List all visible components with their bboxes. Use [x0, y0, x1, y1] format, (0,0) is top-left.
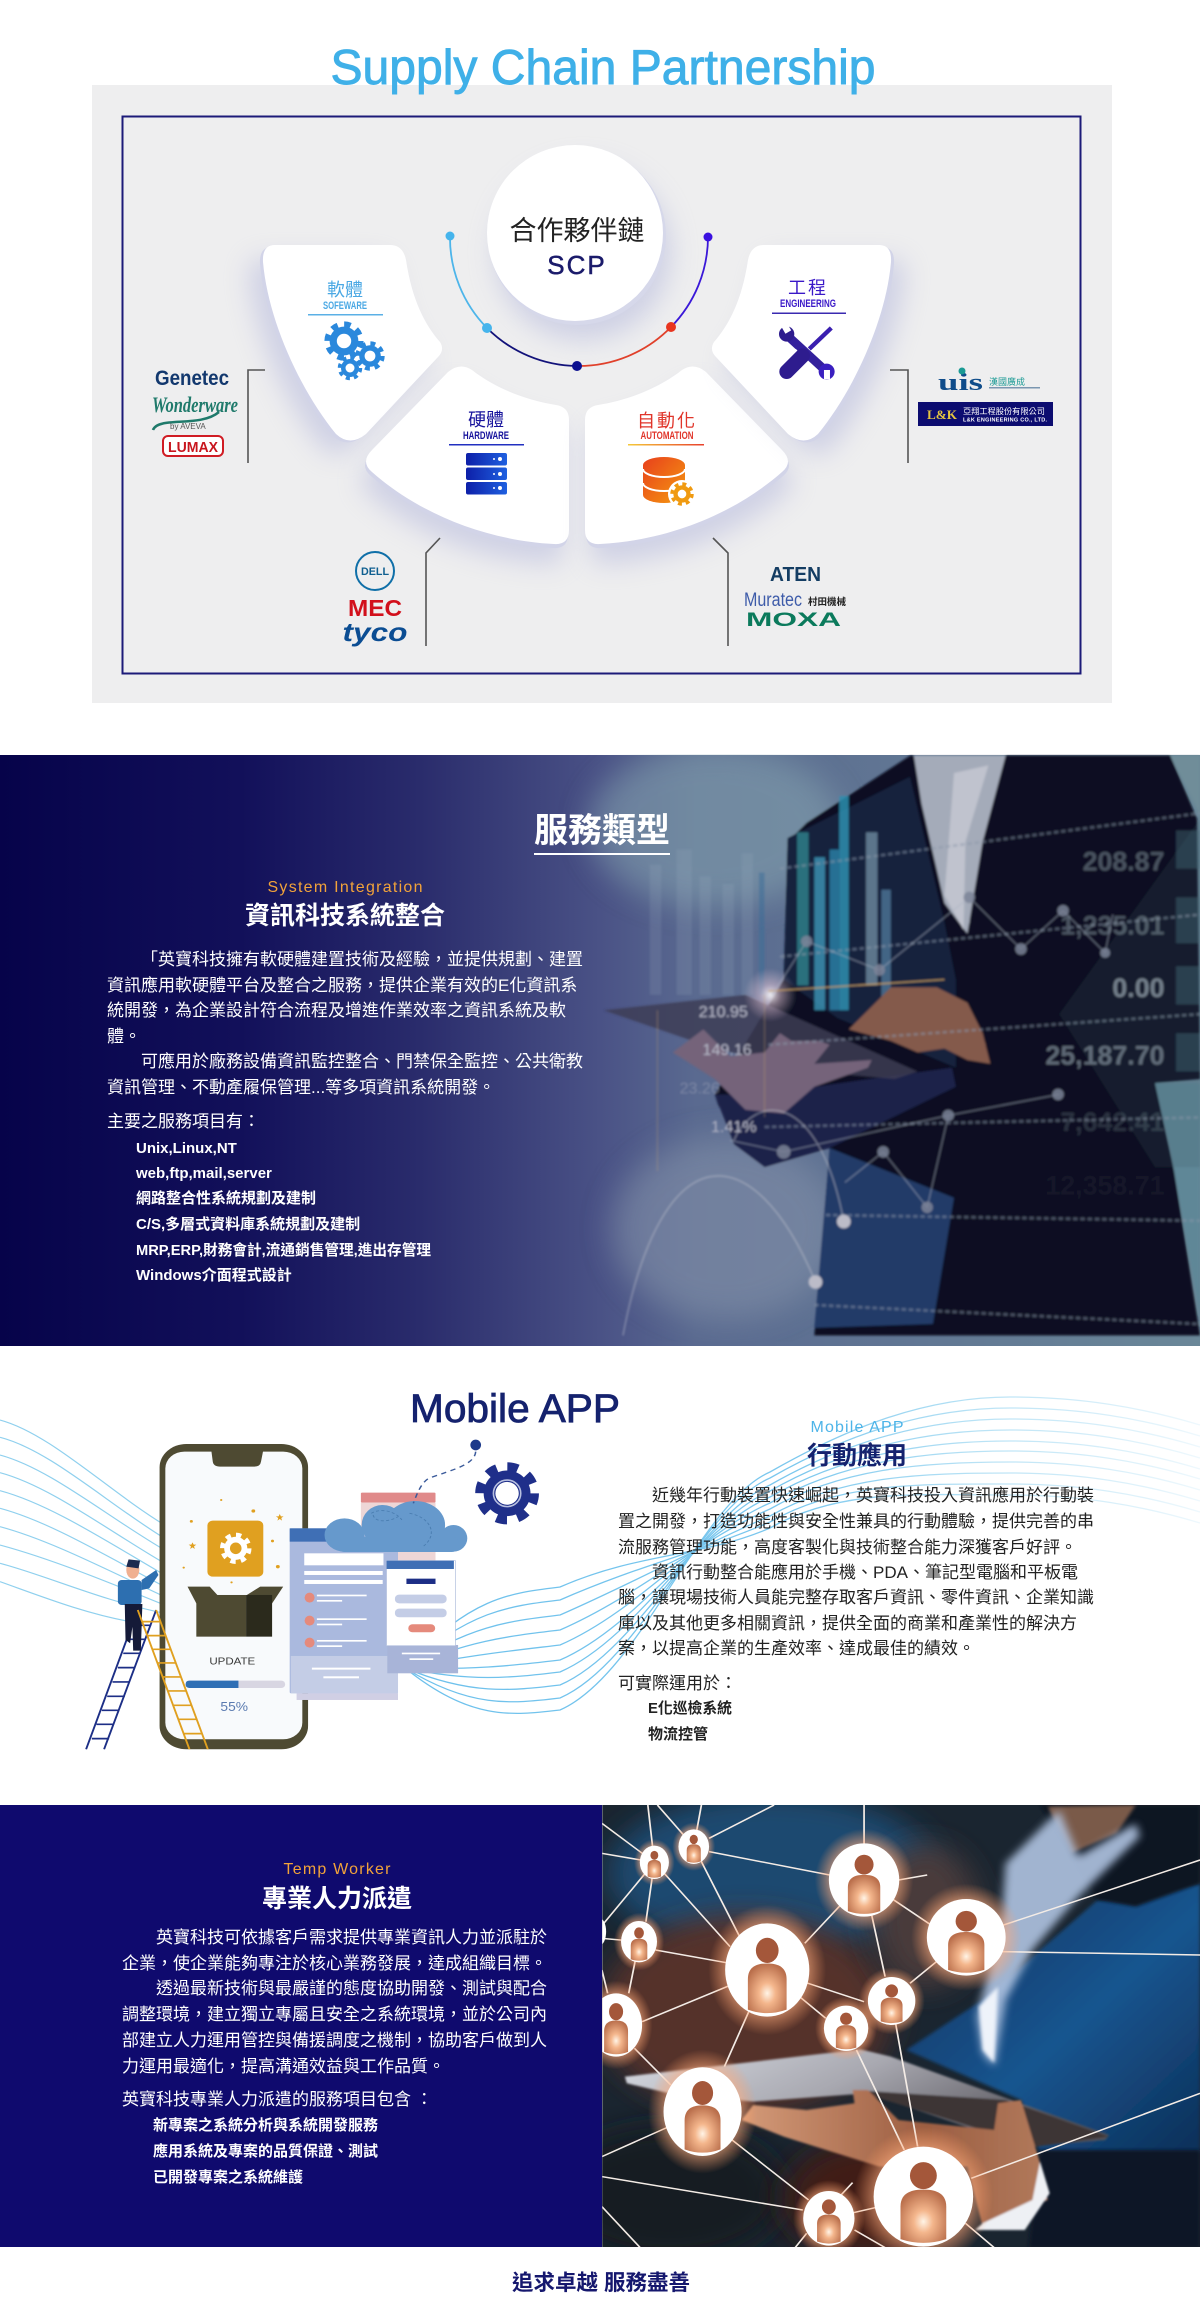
- icon: server: [466, 453, 507, 494]
- text block: temp worker services: 新專案之系統分析與系統開發服務: [153, 2116, 378, 2134]
- text block: main services list: MRP,ERP,財務會計,流通銷售管理,進出存管理: [136, 1241, 431, 1259]
- text block: mobile app description: 近幾年行動裝置快速崛起，英寶科技投入資訊應用於行動裝: [652, 1485, 1094, 1505]
- logos: automation partners: 村田機械: [808, 596, 847, 608]
- text block: main services list: Windows介面程式設計: [136, 1266, 292, 1284]
- icon: gears: [327, 324, 383, 378]
- photo: market figures: 208.87: [1083, 847, 1164, 877]
- panel: software blade: SOFEWARE: [323, 300, 367, 312]
- photo: network lines: [602, 1805, 1200, 2248]
- decorative waves: left: [0, 1420, 165, 1622]
- heading: temp worker: [262, 1861, 412, 1913]
- panel: engineering blade: ENGINEERING: [780, 298, 836, 310]
- icon: phone: UPDATE: [209, 1656, 255, 1667]
- heading: temp worker: 專業人力派遣: [262, 1885, 412, 1913]
- text block: temp worker services: [153, 2116, 378, 2186]
- photo: tablet and hand: [625, 2049, 1109, 2230]
- photo: market figures: 0.00: [1112, 973, 1164, 1003]
- photo: market figures: 7,642.41: [1060, 1107, 1165, 1137]
- photo: dotted trend lines: [765, 813, 1200, 1324]
- panel: mobile app: [0, 1387, 1200, 1749]
- text block: temp worker description: 力運用最適化，提高溝通效益與工作品質。: [122, 2057, 445, 2076]
- text block: mobile app description: [618, 1485, 1094, 1693]
- heading: system integration: System Integration: [268, 879, 422, 896]
- text block: main services list: web,ftp,mail,server: [135, 1165, 272, 1182]
- text block: mobile app description: 腦，讓現場技術人員能完整存取客戶資訊、零件資訊、企業知識: [618, 1587, 1094, 1607]
- panel: software blade: 軟體: [327, 280, 363, 300]
- icon: app windows: [290, 1493, 458, 1700]
- text block: system integration description: 主要之服務項目有：: [107, 1112, 260, 1131]
- chart: hub circle: 合作夥伴鏈: [510, 216, 644, 246]
- text block: temp worker description: 部建立人力運用管控與備援調度之機制，協助客戶做到人: [122, 2031, 547, 2050]
- photo: businessman with tablet: 149.16: [703, 1041, 752, 1059]
- logos: hardware partners: tyco: [342, 617, 408, 647]
- logos: hardware partners: [342, 552, 408, 647]
- logos: engineering partners: [918, 368, 1053, 426]
- text block: mobile app description: 置之開發，打造功能性與安全性兼具的行動體驗，提供完善的串: [618, 1512, 1094, 1531]
- text block: temp worker description: 英寶科技專業人力派遣的服務項目包含 ：: [122, 2089, 433, 2109]
- heading: mobile application: 行動應用: [807, 1441, 907, 1470]
- panel: temp worker: [0, 1793, 1200, 2267]
- text block: mobile app uses: [648, 1699, 732, 1743]
- photo: people nodes: [580, 1822, 1021, 2267]
- icon: database gear: [643, 457, 696, 508]
- text block: temp worker services: 已開發專案之系統維護: [153, 2168, 303, 2186]
- heading: mobile application: Mobile APP: [810, 1419, 904, 1436]
- text block: system integration description: 「英寶科技擁有軟硬體建置技術及經驗，並提供規劃、建置: [141, 949, 583, 969]
- text block: main services list: C/S,多層式資料庫系統規劃及建制: [136, 1215, 360, 1233]
- panel: automation blade: AUTOMATION: [640, 430, 694, 442]
- chart: hub circle: [487, 145, 671, 340]
- photo: businessman with tablet: [589, 746, 1200, 1336]
- heading: system integration: [245, 879, 445, 930]
- text block: main services list: 網路整合性系統規劃及建制: [136, 1189, 316, 1207]
- photo: market figures: 12,358.71: [1045, 1171, 1165, 1201]
- panel: engineering blade: 工程: [788, 278, 828, 298]
- text block: mobile app description: 資訊行動整合能應用於手機、PDA、筆記型電腦和平板電: [652, 1562, 1078, 1582]
- photo: businessman with tablet: 1.41%: [711, 1118, 757, 1136]
- text block: mobile app description: 案，以提高企業的生產效率、達成最佳的績效。: [618, 1639, 975, 1658]
- logos: software partners: Genetec: [155, 367, 229, 390]
- text block: temp worker description: 英寶科技可依據客戶需求提供專業資訊人力並派駐於: [156, 1927, 547, 1947]
- photo: graph nodes: [623, 897, 1113, 1336]
- text block: system integration description: [107, 949, 583, 1131]
- text block: mobile app uses: E化巡檢系統: [648, 1699, 732, 1717]
- text block: mobile app uses: 物流控管: [648, 1725, 708, 1743]
- panel: hardware blade: HARDWARE: [463, 430, 509, 442]
- text block: system integration description: 可應用於廠務設備資訊監控整合、門禁保全監控、公共衛教: [141, 1051, 583, 1071]
- photo: businessman with tablet: 23.26: [680, 1080, 720, 1098]
- text block: temp worker services: 應用系統及專案的品質保證、測試: [153, 2142, 378, 2160]
- logos: engineering partners: uis: [938, 370, 983, 396]
- text block: main services list: [135, 1140, 431, 1284]
- panel: automation blade: 自動化: [637, 411, 697, 431]
- text block: system integration description: 資訊管理、不動產履保管理...等多項資訊系統開發。: [107, 1078, 495, 1097]
- logos: engineering partners: L&K: [927, 407, 958, 422]
- icon: dashed link and gear: [413, 1440, 534, 1520]
- icon: phone: 55%: [220, 1700, 248, 1714]
- panel: engineering blade: [712, 245, 905, 454]
- icon: phone: [160, 1444, 308, 1749]
- chart: hub circle: SCP: [547, 250, 607, 280]
- panel: hardware blade: [361, 366, 569, 564]
- text block: temp worker description: 調整環境，建立獨立專屬且安全之系統環境，並於公司內: [122, 2005, 547, 2024]
- text block: main services list: Unix,Linux,NT: [136, 1140, 237, 1157]
- panel: software blade: [249, 245, 442, 454]
- photo: network of people over tablet: [602, 1805, 1200, 2247]
- text block: system integration description: 體。: [107, 1027, 141, 1046]
- logos: software partners: [152, 367, 238, 456]
- title: Supply Chain Partnership: [330, 41, 876, 95]
- text block: mobile app description: 庫以及其他更多相關資訊，提供全面的商業和產業性的解決方: [618, 1614, 1077, 1633]
- logos: automation partners: MOXA: [746, 610, 841, 631]
- logos: automation partners: Muratec: [744, 590, 802, 611]
- logos: software partners: Wonderware: [152, 392, 238, 417]
- text block: temp worker description: [122, 1927, 547, 2109]
- photo: market figures: 25,187.70: [1045, 1041, 1164, 1071]
- footer slogan: 追求卓越 服務盡善: [512, 2270, 690, 2295]
- chart: connecting arc: [446, 232, 712, 371]
- photo: market figures: [1045, 847, 1165, 1201]
- logos: software partners: by AVEVA: [170, 422, 206, 431]
- text block: system integration description: 統開發，為企業設計符合流程及增進作業效率之資訊系統及軟: [107, 1001, 566, 1020]
- logos: engineering partners: 漢國廣成: [989, 376, 1025, 387]
- heading: system integration: 資訊科技系統整合: [245, 902, 445, 930]
- logos: engineering partners: L&K ENGINEERING CO., LTD.: [963, 418, 1047, 424]
- photo: businessman with tablet: 210.95: [699, 1003, 748, 1021]
- logos: automation partners: ATEN: [770, 564, 821, 586]
- heading: mobile app: Mobile APP: [410, 1387, 620, 1431]
- text block: mobile app description: 流服務管理功能，高度客製化與技術整合能力深獲客戶好評。: [618, 1538, 1077, 1557]
- text block: mobile app description: 可實際運用於：: [618, 1674, 737, 1693]
- panel: automation blade: [585, 366, 793, 564]
- logos: hardware partners: MEC: [348, 595, 402, 621]
- logos: automation partners: [744, 564, 847, 631]
- illustration: phone, ladder and cloud: [0, 1420, 534, 1749]
- decorative waves: right: [405, 1397, 1200, 1713]
- text block: system integration description: 資訊應用軟硬體平台及整合之服務，提供企業有效的E化資訊系: [107, 975, 577, 995]
- heading: temp worker: Temp Worker: [284, 1861, 391, 1878]
- logos: software partners: LUMAX: [168, 439, 218, 456]
- photo: market figures: 1,235.01: [1060, 910, 1165, 940]
- logos: hardware partners: DELL: [361, 566, 389, 578]
- text block: temp worker description: 企業，使企業能夠專注於核心業務發展，達成組織目標。: [122, 1953, 547, 1973]
- logos: engineering partners: 亞翔工程股份有限公司: [963, 406, 1045, 416]
- text block: temp worker description: 透過最新技術與最嚴謹的態度協助開發、測試與配合: [156, 1979, 547, 1998]
- icon: ladders and worker: [86, 1559, 208, 1749]
- panel: hardware blade: 硬體: [468, 410, 504, 430]
- photo: bar chart overlay: [650, 796, 891, 1010]
- panel: system integration: [0, 746, 1200, 1346]
- bracket lines: [248, 370, 908, 646]
- heading: mobile application: [807, 1419, 907, 1470]
- panel: supply chain diagram: [92, 85, 1112, 703]
- heading: service types: 服務類型: [534, 812, 670, 850]
- icon: cloud: [325, 1501, 467, 1552]
- icon: wrench and screwdriver: [779, 322, 835, 380]
